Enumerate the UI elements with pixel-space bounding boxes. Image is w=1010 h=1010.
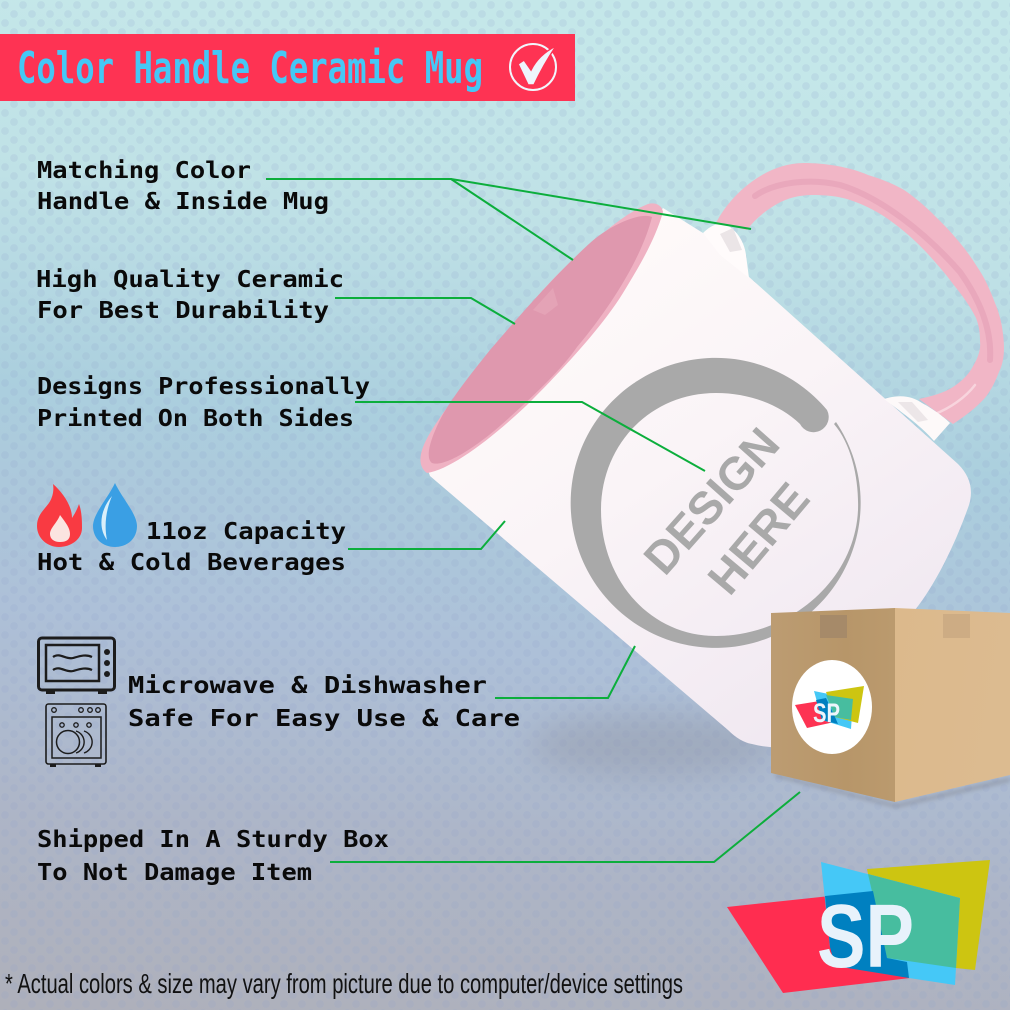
mug	[420, 163, 1004, 747]
title banner	[0, 34, 575, 101]
feature: high quality ceramic: High Quality Ceramic	[36, 267, 344, 293]
mug body	[427, 208, 971, 747]
design here emblem: HERE	[697, 473, 819, 604]
feature: matching color: Matching Color	[37, 158, 251, 184]
feature: sturdy box: Shipped In A Sturdy Box	[37, 827, 389, 853]
mug rim and pink interior	[420, 203, 663, 473]
icon: flame	[37, 484, 82, 547]
feature: capacity: Hot & Cold Beverages	[37, 550, 346, 576]
feature: matching color	[37, 158, 751, 260]
mug handle	[716, 163, 1004, 424]
feature: microwave and dishwasher safe	[128, 646, 635, 732]
design here emblem: DESIGN	[633, 418, 789, 584]
title banner: Color Handle Ceramic Mug	[17, 43, 483, 94]
feature: designs printed	[37, 374, 705, 471]
feature: capacity: 11oz Capacity	[146, 519, 346, 545]
feature: sturdy box	[37, 792, 800, 886]
feature: sturdy box: To Not Damage Item	[37, 860, 312, 886]
feature: microwave and dishwasher safe: Safe For Easy Use & Care	[128, 706, 520, 732]
shipping box	[771, 608, 1010, 808]
brand logo: SP	[817, 887, 914, 987]
feature: capacity	[37, 519, 505, 576]
brand logo	[727, 860, 990, 993]
feature: designs printed: Printed On Both Sides	[37, 406, 354, 432]
footnote: * Actual colors & size may vary from picture due to computer/device settings	[5, 968, 683, 999]
feature: designs printed: Designs Professionally	[37, 374, 370, 400]
icon: dishwasher	[46, 704, 106, 767]
box sticker logo	[792, 660, 872, 754]
feature: microwave and dishwasher safe: Microwave & Dishwasher	[128, 673, 487, 699]
box sticker logo: SP	[813, 698, 840, 728]
mug shadow	[530, 713, 780, 777]
design here emblem	[571, 358, 861, 648]
icon: microwave	[38, 638, 114, 694]
icon: water drop	[93, 483, 137, 547]
feature: high quality ceramic	[36, 267, 515, 324]
handle joints	[703, 224, 950, 441]
feature: matching color: Handle & Inside Mug	[37, 189, 329, 215]
feature: high quality ceramic: For Best Durability	[37, 298, 329, 324]
